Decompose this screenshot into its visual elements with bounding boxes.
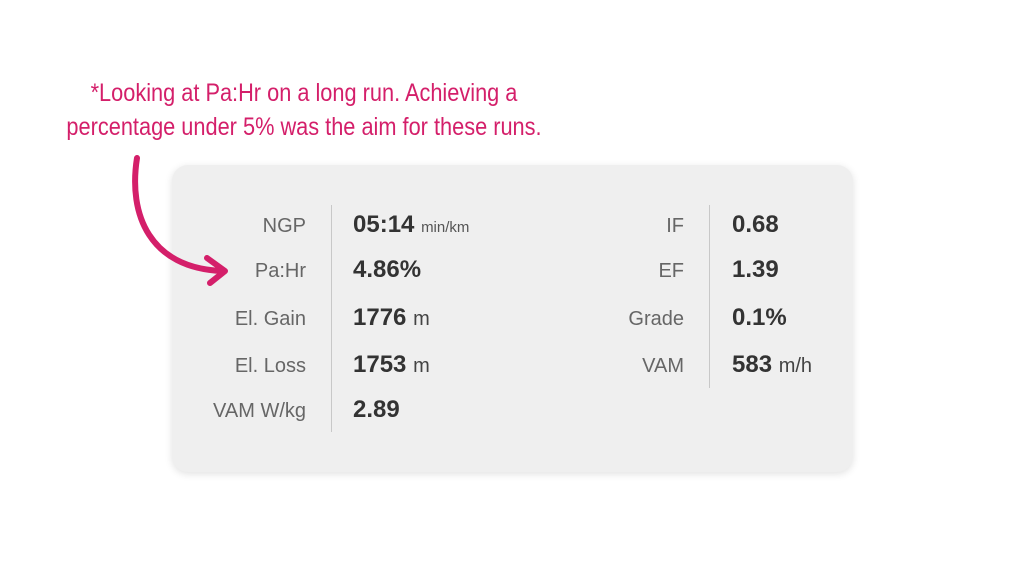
- metrics grid: Grade: [628, 308, 684, 330]
- metrics grid: VAM W/kg: [213, 400, 306, 422]
- metrics grid: 0.1%: [732, 304, 787, 331]
- annotation note: percentage under 5% was the aim for these runs.: [66, 113, 542, 141]
- metrics grid: VAM: [642, 355, 684, 377]
- arrow: curved pointer to Pa:Hr: [132, 155, 228, 286]
- panel: metrics table: [172, 165, 853, 472]
- metrics grid: 1.39: [732, 256, 779, 283]
- metrics grid: 583 m/h: [732, 351, 812, 378]
- metrics grid: EF: [658, 260, 684, 282]
- metrics grid: 2.89: [353, 396, 400, 423]
- annotation note: *Looking at Pa:Hr on a long run. Achieving a: [91, 79, 517, 107]
- metrics grid: 05:14 min/km: [353, 211, 469, 238]
- metrics grid: 1753 m: [353, 351, 430, 378]
- metrics grid: El. Loss: [235, 355, 306, 377]
- metrics grid: IF: [666, 215, 684, 237]
- metrics grid: 4.86%: [353, 256, 421, 283]
- metrics grid: [213, 205, 812, 432]
- metrics grid: 0.68: [732, 211, 779, 238]
- metrics grid: NGP: [263, 215, 306, 237]
- metrics grid: El. Gain: [235, 308, 306, 330]
- metrics grid: 1776 m: [353, 304, 430, 331]
- annotation note: [66, 79, 542, 141]
- metrics grid: Pa:Hr: [255, 260, 306, 282]
